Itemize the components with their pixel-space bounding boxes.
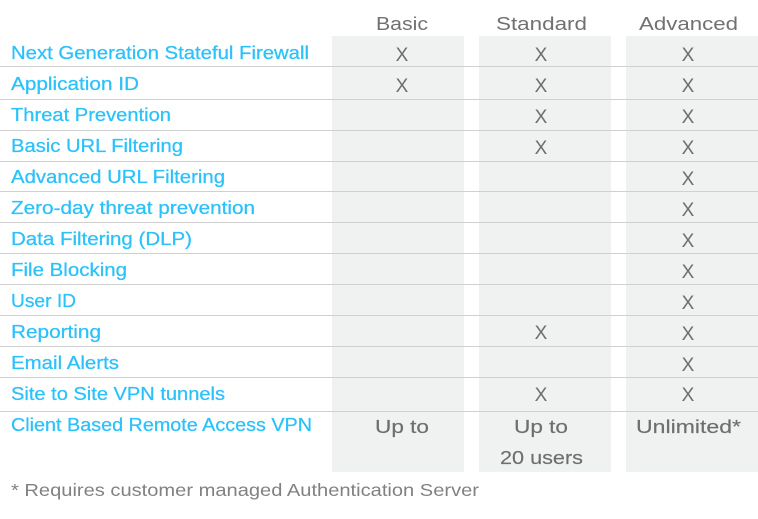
advanced column marks: X [682, 324, 695, 345]
column headings: Basic [376, 14, 428, 34]
panel: basic column background [332, 36, 464, 472]
basic column marks: X [396, 45, 409, 66]
advanced column marks: X [682, 200, 695, 221]
column headings: Standard [496, 14, 587, 34]
panel: advanced column background [626, 36, 758, 472]
advanced column marks: X [682, 262, 695, 283]
advanced column marks: X [682, 169, 695, 190]
standard column marks: X [535, 107, 548, 128]
remote access limits [375, 417, 741, 468]
standard column marks: X [535, 385, 548, 406]
feature labels: File Blocking [11, 260, 127, 280]
basic column marks [396, 45, 409, 97]
remote access limits: 20 users [500, 448, 583, 468]
remote access limits: Up to [514, 417, 568, 437]
feature labels [11, 43, 312, 435]
advanced column marks: X [682, 76, 695, 97]
feature labels: Zero-day threat prevention [11, 198, 255, 218]
feature labels: Advanced URL Filtering [11, 167, 225, 187]
standard column marks: X [535, 76, 548, 97]
column headings: Advanced [639, 14, 738, 34]
standard column marks: X [535, 138, 548, 159]
advanced column marks: X [682, 385, 695, 406]
advanced column marks: X [682, 293, 695, 314]
advanced column marks: X [682, 107, 695, 128]
advanced column marks: X [682, 45, 695, 66]
feature labels: Site to Site VPN tunnels [11, 384, 225, 404]
basic column marks: X [396, 76, 409, 97]
advanced column marks [682, 45, 695, 406]
advanced column marks: X [682, 138, 695, 159]
feature labels: Next Generation Stateful Firewall [11, 43, 309, 63]
standard column marks [535, 45, 548, 406]
advanced column marks: X [682, 231, 695, 252]
feature labels: User ID [11, 291, 76, 311]
feature labels: Basic URL Filtering [11, 136, 183, 156]
remote access limits: Up to [375, 417, 429, 437]
feature labels: Threat Prevention [11, 105, 171, 125]
feature labels: Reporting [11, 322, 101, 342]
standard column marks: X [535, 45, 548, 66]
feature labels: Data Filtering (DLP) [11, 229, 192, 249]
remote access limits: Unlimited* [636, 417, 741, 437]
advanced column marks: X [682, 355, 695, 376]
feature labels: Client Based Remote Access VPN [11, 415, 312, 435]
panel: standard column background [479, 36, 611, 472]
footnote: * Requires customer managed Authentication Server [11, 480, 479, 500]
standard column marks: X [535, 323, 548, 344]
feature labels: Email Alerts [11, 353, 119, 373]
feature labels: Application ID [11, 74, 139, 94]
column headings [376, 14, 738, 34]
